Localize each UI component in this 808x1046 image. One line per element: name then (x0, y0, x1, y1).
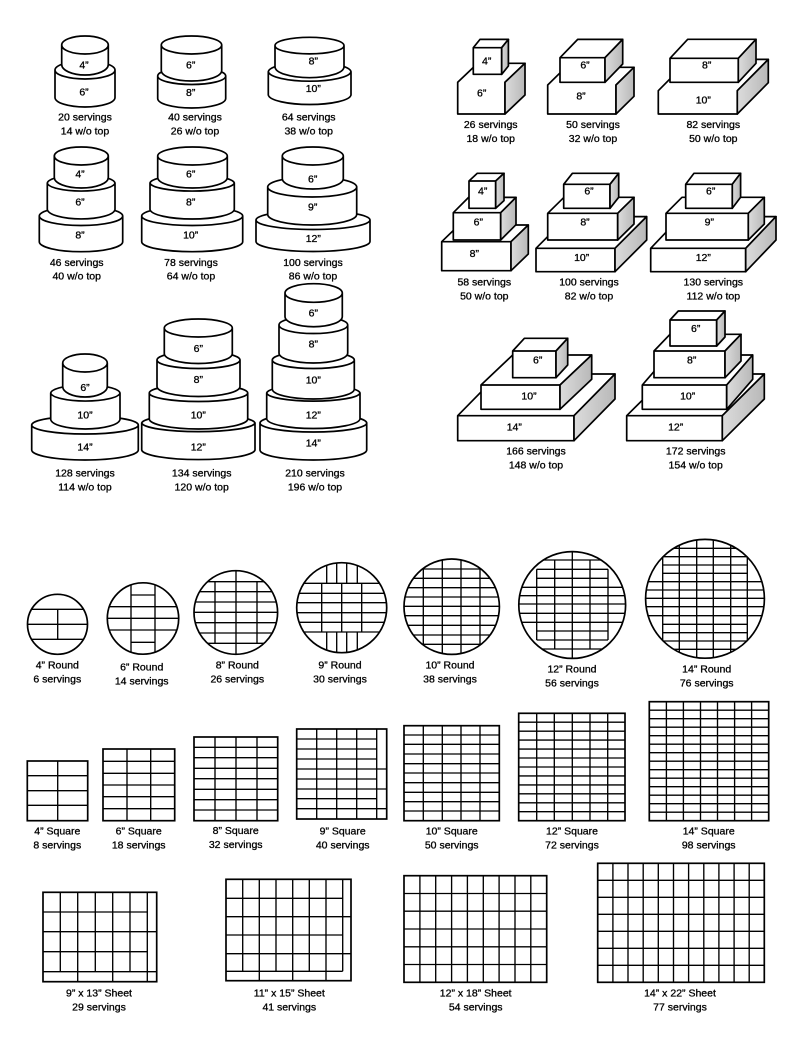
cake: round 6, 8, 10, 12 and 14 inch: 6” (309, 307, 318, 319)
cake: square 6, 8, 10 and 12 inch (627, 311, 764, 472)
cake: square 6, 9 and 12 inch: 12” (696, 252, 711, 264)
guide: 6 inch round: 14 servings (115, 675, 169, 687)
guide: 14 inch square: 98 servings (682, 840, 736, 852)
cake: square 6, 10 and 14 inch: 148 w/o top (509, 460, 563, 472)
guide: 9 inch round: 30 servings (313, 673, 367, 685)
guide: 9 by 13 inch sheet (43, 892, 157, 1013)
guide: 14 by 22 inch sheet (598, 863, 764, 1013)
cake: round 6 and 8 inch (158, 36, 226, 137)
cake: round 6, 8 and 10 inch: 10” (183, 230, 199, 242)
cake: square 6, 8, 10 and 12 inch: 12” (668, 421, 684, 433)
cake: round 6, 8, 10 and 12 inch: 12” (191, 441, 206, 453)
guide: 11 by 15 inch sheet: 41 servings (262, 1001, 316, 1013)
cake: square 8 and 10 inch: 10” (696, 95, 711, 107)
guide: 8 inch round: 26 servings (210, 673, 264, 685)
guide: 4 inch round (27, 594, 88, 685)
cake: square 6, 8 and 10 inch: 6” (584, 186, 594, 198)
cake: round 4, 6 and 8 inch: 8” (75, 230, 85, 242)
guide: 9 by 13 inch sheet: 29 servings (72, 1001, 126, 1013)
cake: round 6, 9 and 12 inch: 86 w/o top (289, 271, 337, 283)
cake: round 6, 10 and 14 inch: 114 w/o top (58, 481, 112, 493)
cake: square 6 and 8 inch: 8” (576, 91, 586, 103)
cake: square 6, 8, 10 and 12 inch: 6” (691, 323, 701, 335)
guide: 12 by 18 inch sheet: 54 servings (449, 1001, 503, 1013)
guide: 12 inch round (518, 551, 627, 689)
cake: square 4, 6 and 8 inch (442, 173, 528, 303)
cake: square 6, 8, 10 and 12 inch: 8” (687, 355, 697, 367)
cake: round 6, 8, 10 and 12 inch: 120 w/o top (175, 481, 229, 493)
cake: square 6, 9 and 12 inch (651, 173, 776, 303)
guide: 12 inch square: 12” Square (546, 826, 598, 838)
cake: square 4, 6 and 8 inch: 50 w/o top (460, 291, 509, 303)
cake: square 6, 8 and 10 inch: 82 w/o top (565, 291, 613, 303)
guide: 10 inch round: 10” Round (425, 659, 475, 671)
panel: round cake cutting guides (27, 539, 765, 689)
guide: 10 inch square (404, 726, 499, 852)
cake: square 4 and 6 inch (458, 39, 525, 145)
guide: 6 inch round: 6” Round (120, 661, 163, 673)
cake: round 8 and 10 inch: 64 servings (282, 111, 336, 123)
guide: 8 inch square (194, 737, 278, 851)
cake: round 4, 6 and 8 inch: 46 servings (50, 257, 104, 269)
guide: 10 inch round (404, 559, 500, 685)
guide: 6 inch square: 18 servings (112, 840, 166, 852)
cake: round 6, 8, 10 and 12 inch: 134 servings (172, 467, 231, 479)
cake: square 6, 9 and 12 inch: 130 servings (684, 277, 743, 289)
cake: round 6 and 8 inch: 26 w/o top (171, 125, 219, 137)
cake: round 6, 10 and 14 inch: 128 servings (55, 467, 115, 479)
guide: 10 inch square: 50 servings (425, 840, 479, 852)
guide: 14 inch round: 14” Round (682, 663, 731, 675)
cake: round 6, 8, 10, 12 and 14 inch (260, 284, 367, 493)
guide: 11 by 15 inch sheet (226, 879, 351, 1013)
cake: square 6, 8, 10 and 12 inch: 10” (680, 390, 696, 402)
cake: round 6, 8, 10, 12 and 14 inch: 10” (306, 375, 321, 387)
guide: 14 by 22 inch sheet: 77 servings (653, 1001, 707, 1013)
cake: round 4, 6 and 8 inch: 40 w/o top (52, 271, 101, 283)
cake: round 4 and 6 inch (55, 36, 115, 137)
cake: square 8 and 10 inch: 8” (702, 60, 712, 72)
guide: 9 inch round (296, 562, 387, 685)
cake: round 6 and 8 inch: 6” (186, 60, 196, 72)
cake: round 8 and 10 inch: 8” (309, 55, 318, 67)
guide: 14 inch square (649, 702, 769, 852)
cake: square 6, 10 and 14 inch: 14” (507, 421, 522, 433)
cake: square 6, 9 and 12 inch: 9” (705, 216, 714, 228)
guide: 6 inch round (107, 582, 179, 687)
cake: square 6, 8 and 10 inch: 100 servings (559, 277, 619, 289)
cake: square 6, 8 and 10 inch (536, 173, 647, 303)
cake: round 6, 10 and 14 inch: 6” (80, 382, 90, 394)
cake: square 8 and 10 inch: 82 servings (686, 119, 740, 131)
guide: 10 inch round: 38 servings (423, 673, 477, 685)
cake: round 6 and 8 inch: 8” (186, 87, 196, 99)
cake: round 4, 6 and 8 inch (39, 147, 123, 283)
panel: tiered square cakes (442, 39, 776, 472)
cake: round 4 and 6 inch: 6” (79, 86, 89, 98)
cake: square 4, 6 and 8 inch: 8” (470, 248, 479, 260)
cake: square 6 and 8 inch: 32 w/o top (569, 133, 617, 145)
guide: 12 by 18 inch sheet: 12” x 18” Sheet (440, 987, 512, 999)
cake: round 4, 6 and 8 inch: 6” (75, 197, 85, 209)
cake: square 6, 9 and 12 inch: 112 w/o top (687, 291, 740, 303)
guide: 9 inch square: 9” Square (320, 826, 366, 838)
cake: square 4 and 6 inch: 26 servings (464, 119, 518, 131)
guide: 4 inch round: 4” Round (36, 659, 79, 671)
panel: tiered round cakes (32, 36, 370, 493)
cake: square 6, 8 and 10 inch: 10” (574, 252, 590, 264)
cake: square 6 and 8 inch: 6” (580, 60, 590, 72)
cake: round 6, 8, 10, 12 and 14 inch: 8” (309, 339, 318, 351)
guide: 10 inch square: 10” Square (426, 826, 478, 838)
cake: round 6, 8, 10 and 12 inch: 10” (191, 410, 206, 422)
cake: round 4, 6 and 8 inch: 4” (75, 169, 85, 181)
guide: 8 inch round: 8” Round (216, 659, 259, 671)
cake: round 8 and 10 inch (268, 37, 351, 137)
cake: round 6, 9 and 12 inch: 100 servings (283, 257, 343, 269)
cake: square 6, 10 and 14 inch (458, 338, 615, 472)
guide: 4 inch square: 4” Square (34, 826, 81, 838)
guide: 14 inch round: 76 servings (680, 677, 734, 689)
guide: 9 inch round: 9” Round (318, 659, 362, 671)
cake: square 4, 6 and 8 inch: 6” (474, 216, 483, 228)
cake: square 4 and 6 inch: 18 w/o top (466, 133, 515, 145)
cake: round 6, 8, 10, 12 and 14 inch: 196 w/o top (288, 481, 342, 493)
guide: 6 inch square: 6” Square (116, 826, 162, 838)
cake: square 6, 10 and 14 inch: 6” (533, 355, 543, 367)
cake: square 6, 8, 10 and 12 inch: 154 w/o top (669, 460, 723, 472)
cake: square 4 and 6 inch: 6” (477, 87, 487, 99)
cake: round 4 and 6 inch: 20 servings (58, 111, 112, 123)
guide: 9 by 13 inch sheet: 9” x 13” Sheet (66, 988, 132, 1000)
guide: 9 inch square (297, 729, 387, 852)
cake: round 6, 8, 10 and 12 inch: 6” (194, 343, 203, 355)
cake: square 6 and 8 inch (548, 39, 634, 145)
cake: round 6, 8 and 10 inch (142, 147, 243, 283)
cake: round 6, 8, 10 and 12 inch (142, 319, 255, 493)
cake: round 6, 10 and 14 inch: 10” (77, 410, 93, 422)
cake: round 6, 8, 10 and 12 inch: 8” (194, 374, 203, 386)
cake: square 6, 8, 10 and 12 inch: 172 servings (666, 445, 725, 457)
guide: 4 inch square (27, 761, 88, 852)
guide: 12 inch square (519, 713, 625, 852)
cake: square 6, 10 and 14 inch: 10” (521, 390, 537, 402)
guide: 6 inch square (103, 749, 175, 852)
cake: round 6, 10 and 14 inch: 14” (77, 441, 93, 453)
guide: 14 inch round (645, 539, 765, 689)
cake: round 8 and 10 inch: 38 w/o top (284, 125, 333, 137)
guide: 12 inch round: 56 servings (545, 677, 599, 689)
cake: round 8 and 10 inch: 10” (306, 83, 321, 95)
cake: round 4 and 6 inch: 14 w/o top (61, 125, 109, 137)
cake: round 6, 8, 10, 12 and 14 inch: 210 servings (285, 467, 345, 479)
guide: 9 inch square: 40 servings (316, 840, 370, 852)
cake: square 6, 10 and 14 inch: 166 servings (506, 445, 566, 457)
cake: round 6, 8 and 10 inch: 8” (186, 197, 196, 209)
cake: round 6 and 8 inch: 40 servings (168, 111, 222, 123)
guide: 12 inch round: 12” Round (547, 663, 597, 675)
cake: square 4, 6 and 8 inch: 58 servings (457, 277, 511, 289)
cake: round 6, 8, 10, 12 and 14 inch: 12” (306, 410, 321, 422)
cake: round 6, 8 and 10 inch: 78 servings (164, 257, 218, 269)
guide: 8 inch square: 32 servings (209, 839, 263, 851)
guide: 8 inch round (194, 570, 278, 685)
guide: 8 inch square: 8” Square (213, 825, 259, 837)
cake: round 6, 9 and 12 inch (256, 147, 370, 283)
cake: square 6, 8 and 10 inch: 8” (580, 216, 590, 228)
cake: square 6, 9 and 12 inch: 6” (706, 186, 716, 198)
cake: square 4, 6 and 8 inch: 4” (478, 186, 488, 198)
guide: 4 inch round: 6 servings (33, 673, 81, 685)
cake: square 6 and 8 inch: 50 servings (566, 119, 620, 131)
cake: round 6, 8, 10, 12 and 14 inch: 14” (306, 437, 321, 449)
guide: 14 inch square: 14” Square (683, 826, 735, 838)
cake: round 6, 9 and 12 inch: 6” (308, 174, 318, 186)
guide: 12 inch square: 72 servings (545, 840, 599, 852)
guide: 14 by 22 inch sheet: 14” x 22” Sheet (644, 987, 716, 999)
cake: round 6, 9 and 12 inch: 12” (306, 233, 321, 245)
cake: round 6, 8 and 10 inch: 6” (186, 169, 196, 181)
cake: square 8 and 10 inch: 50 w/o top (689, 133, 738, 145)
guide: 11 by 15 inch sheet: 11” x 15” Sheet (254, 988, 325, 1000)
cake: round 6, 8 and 10 inch: 64 w/o top (167, 271, 215, 283)
panel: sheet cake cutting guides (43, 863, 764, 1013)
guide: 12 by 18 inch sheet (404, 876, 547, 1013)
cake: round 4 and 6 inch: 4” (79, 60, 89, 72)
guide: 4 inch square: 8 servings (33, 840, 81, 852)
cake: square 4 and 6 inch: 4” (482, 55, 492, 67)
panel: square cake cutting guides (27, 702, 769, 852)
cake: round 6, 10 and 14 inch (32, 354, 138, 493)
cake: round 6, 9 and 12 inch: 9” (308, 201, 318, 213)
cake: square 8 and 10 inch (658, 39, 768, 145)
